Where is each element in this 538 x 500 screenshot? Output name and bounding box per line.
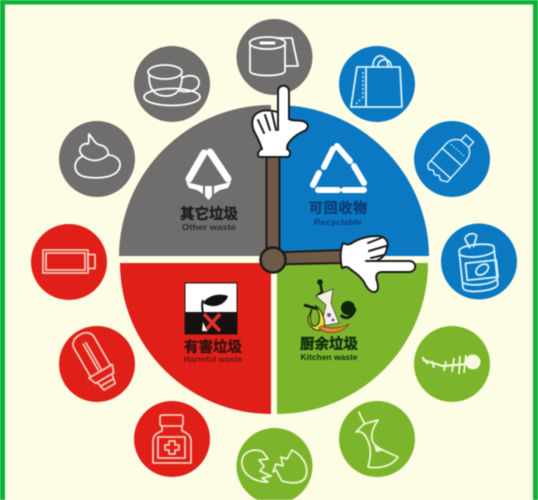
- icon: tin can: [441, 224, 517, 300]
- icon: apple core: [339, 401, 415, 477]
- heading: recyclable: 可回收物: [309, 200, 367, 216]
- heading: kitchen waste: 厨余垃圾: [300, 335, 358, 353]
- label: other waste english: Other waste: [182, 223, 237, 232]
- icon: broken eggshell: [236, 428, 312, 500]
- heading: other waste: 其它垃圾: [180, 205, 238, 223]
- icon: recycling triangle: [313, 146, 364, 190]
- pointer: centre pivot: [260, 248, 286, 272]
- icon: energy-saving bulb: [59, 326, 135, 402]
- icon: medicine bottle: [134, 401, 210, 477]
- icon: pointing-right glove: [341, 236, 415, 292]
- panel: kitchen waste quadrant: [277, 263, 428, 414]
- pointer: clock hand right: [272, 236, 415, 292]
- icon: plastic bottle: [414, 121, 490, 197]
- icon: battery: [31, 224, 107, 300]
- label: kitchen waste english: Kitchen waste: [300, 353, 358, 362]
- pointer: clock hand up: [252, 86, 308, 255]
- panel: harmful waste quadrant: [120, 263, 271, 414]
- label: harmful waste english: Harmful waste: [184, 355, 243, 364]
- icon: fish bone: [414, 326, 490, 402]
- icon: coffee cup: [134, 46, 210, 122]
- heading: harmful waste: 有害垃圾: [184, 338, 242, 356]
- icon: pointing-up glove: [252, 86, 308, 157]
- icon: food scraps: [304, 279, 355, 333]
- icon: harmful waste sign: [185, 283, 237, 334]
- icon: waste pile: [59, 121, 135, 197]
- panel: recyclable quadrant: [277, 105, 429, 256]
- icon: toilet roll: [236, 19, 312, 95]
- icon: other waste arrow: [186, 152, 231, 200]
- label: recyclable english: Recyclable: [314, 218, 363, 227]
- panel: other waste quadrant: [119, 105, 271, 256]
- icon: shopping bag: [339, 46, 415, 122]
